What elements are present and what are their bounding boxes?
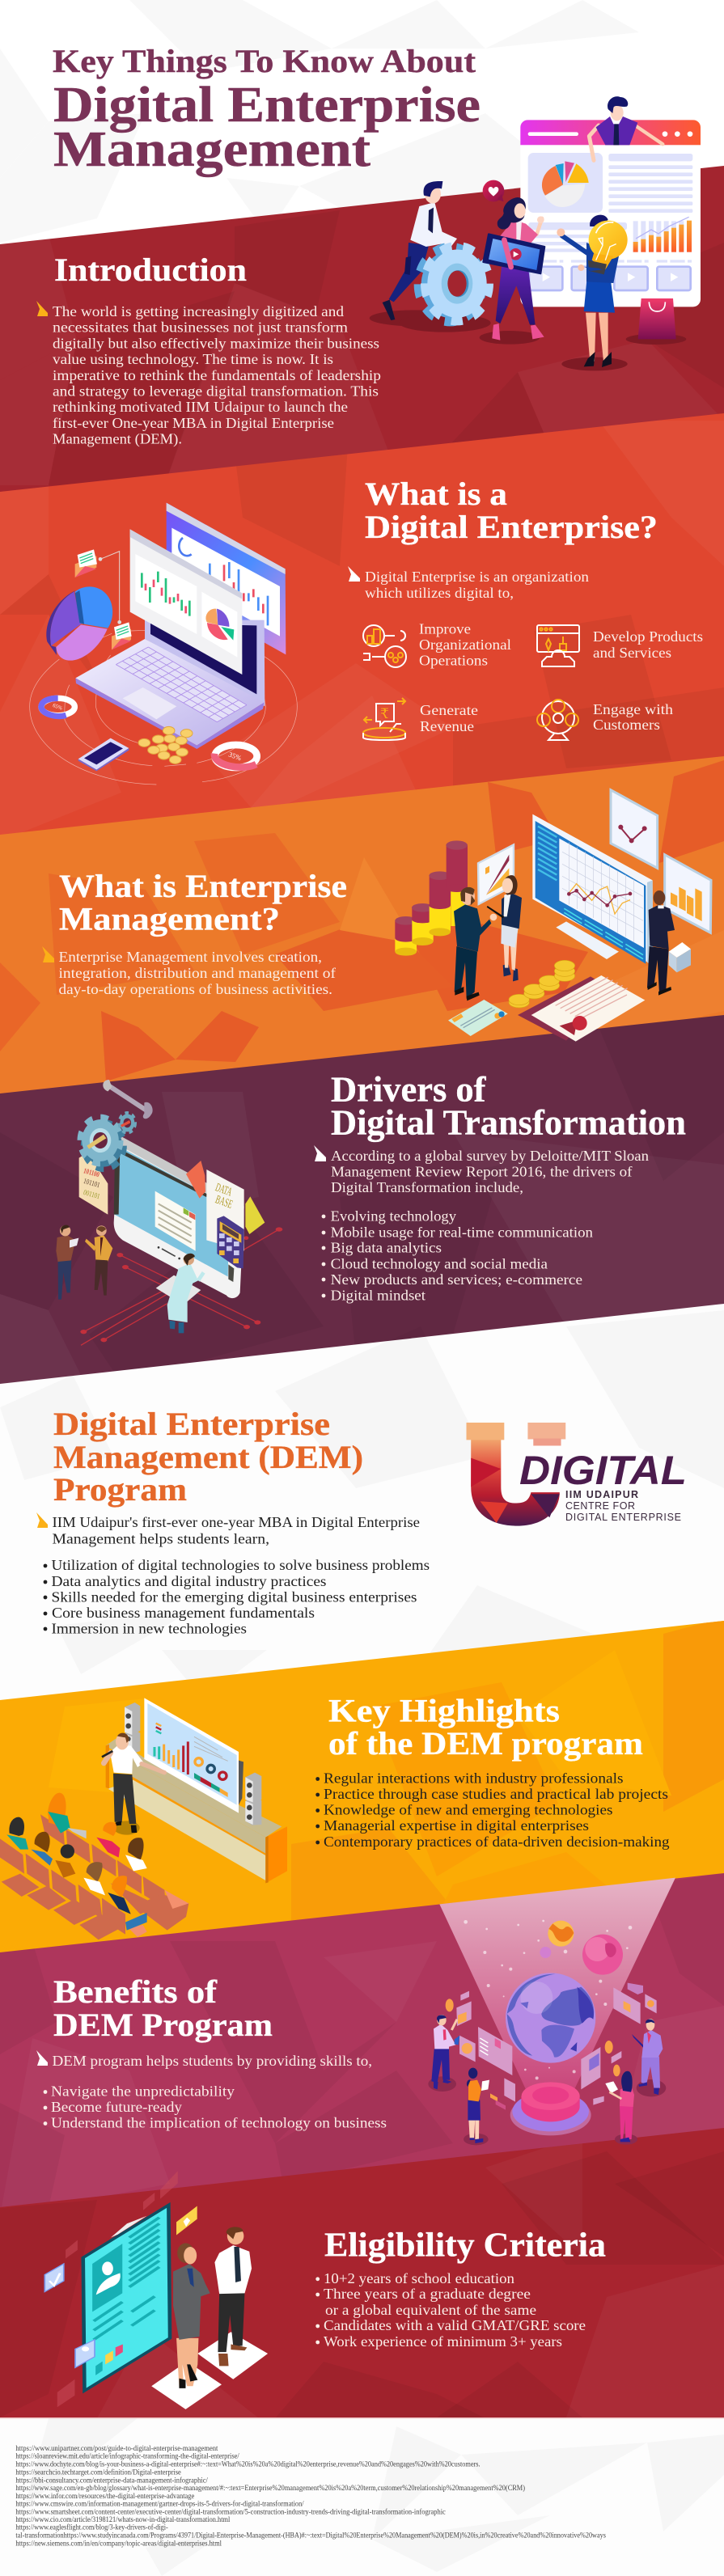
label: generate revenue [420,702,478,734]
list: drivers of digital transformation: Evolving technology [331,1208,456,1225]
panel: DEM program background [0,1304,724,1700]
text block: introduction [36,301,381,448]
list: benefits: Become future-ready [51,2099,182,2115]
text block: references: https://www.unipartner.com/post/guide-to-digital-enterprise-management [15,2445,218,2453]
label: improve organizational operations: Improve [419,621,471,637]
heading: DEM program: Program [53,1471,187,1508]
text block: introduction: rethinking motivated IIM Udaipur to launch the [53,399,348,415]
text block: references: https://www.eaglesflight.com/blog/3-key-drivers-of-digi- [15,2523,168,2532]
list: DEM program learnings: Core business management fundamentals [52,1605,315,1621]
text block: drivers intro: According to a global survey by Deloitte/MIT Sloan [331,1148,649,1164]
heading: DEM program: Management (DEM) [53,1439,363,1475]
text block: digital enterprise definition: which utilizes digital to, [365,585,514,601]
list: eligibility criteria [315,2270,586,2350]
logo: U Digital IIM Udaipur Centre for Digital Enterprise: CENTRE FOR [565,1500,635,1512]
list: benefits: Understand the implication of technology on business [51,2115,387,2131]
icon: generate revenue: ₹ [380,706,389,721]
label: improve organizational operations: Organizational [419,637,511,653]
label: engage with customers [593,701,673,733]
text block: references: https://www.dochyte.com/blog/is-your-business-a-digital-enterprise#:~:text=What%20is%20a%20digital%20enterprise,revenue%20and%20engages%20with%20customers. [15,2461,481,2469]
text block: DEM program intro: Management helps students learn, [52,1530,269,1546]
title [53,43,481,177]
text block: references: https://www.cmswire.com/information-management/gartner-drops-its-5-drivers-for-digital-transformation/ [15,2499,304,2508]
list: drivers of digital transformation: Cloud technology and social media [331,1255,548,1271]
list: eligibility criteria: Three years of a graduate degree [324,2286,531,2302]
text block: introduction: digitally but also effectively maximize their business [53,335,379,351]
text block: digital enterprise definition [348,566,589,601]
illustration: monitor with gears and database: 001101 [83,1189,101,1201]
list: eligibility criteria: Work experience of minimum 3+ years [324,2333,562,2350]
panel: drivers of digital transformation background [0,1015,724,1384]
text block: drivers intro [314,1145,649,1195]
heading: drivers of digital transformation: Digital Transformation [331,1103,686,1143]
panel: key highlights background [0,1621,724,1952]
text block: references: https://www.sage.com/en-gb/blog/glossary/what-is-enterprise-management/#:~:text=Enterprise%20management%20is%20a%20term,customer%20relationship%20management%20(CRM) [15,2484,525,2493]
list: eligibility criteria: 10+2 years of school education [324,2270,514,2286]
logo: U Digital IIM Udaipur Centre for Digital Enterprise [467,1423,687,1526]
list: benefits [44,2083,387,2131]
panel: introduction background [0,166,724,492]
heading: key highlights: of the DEM program [328,1725,643,1762]
label: develop products and services [593,628,703,661]
illustration: monitor with gears and database: BASE [214,1193,235,1212]
illustration: team building a digital dashboard [370,96,701,370]
heading: DEM program [53,1406,363,1508]
list: key highlights: Knowledge of new and emerging technologies [324,1802,613,1818]
text block: DEM program intro [36,1512,420,1546]
logo: U Digital IIM Udaipur Centre for Digital Enterprise: DIGITAL [519,1448,687,1493]
label: develop products and services: and Services [593,645,671,661]
icon: develop products and services [537,625,579,666]
text block: drivers intro: Management Review Report 2016, the drivers of [331,1164,633,1180]
panel: references background [0,2417,724,2576]
text block: enterprise management: Enterprise Management involves creation, [58,949,322,965]
illustration: resume clipboard and candidates [44,2171,268,2409]
heading: introduction: Introduction [54,252,247,288]
heading: what is enterprise management: What is Enterprise [59,868,347,904]
panel: eligibility criteria background [0,2128,724,2418]
heading: DEM program: Digital Enterprise [53,1406,330,1442]
text block: references: https://bbi-consultancy.com/enterprise-data-management-infographic/ [15,2476,208,2485]
heading: drivers of digital transformation [331,1070,686,1143]
heading: what is a digital enterprise: What is a [365,476,507,512]
text block: references: https://new.siemens.com/in/en/company/topic-areas/digital-enterprises.html [15,2540,222,2549]
text block: digital enterprise definition: Digital Enterprise is an organization [365,569,589,585]
icon: generate revenue [363,698,405,740]
text block: drivers intro: Digital Transformation include, [331,1179,523,1195]
illustration: monitor with gears and database [56,1080,282,1345]
list: DEM program learnings: Data analytics and digital industry practices [52,1573,327,1589]
list: drivers of digital transformation [322,1208,593,1303]
text block: references: tal-transformationhttps://www.studyincanada.com/Programs/43971/Digital-Enterprise-Management-(HBA)#:~:text=Digital%20Enterprise%20Management%20(DEM)%20is,in%20creative%20and%20innovative%20ways [15,2532,606,2540]
heading: benefits of DEM program: DEM Program [53,2007,273,2043]
text block: introduction: and strategy to leverage digital transformation. This [53,383,379,400]
panel: what is enterprise management background [0,756,724,1093]
illustration: monitor with gears and database: DATA [214,1181,234,1199]
logo: U Digital IIM Udaipur Centre for Digital Enterprise: DIGITAL ENTERPRISE [565,1512,681,1523]
list: benefits: Navigate the unpredictability [51,2083,235,2100]
text block: references: https://www.smartsheet.com/content-center/executive-center/digital-transformation/5-construction-industry-trends-driving-digital-transformation-infographic [15,2507,446,2516]
label: engage with customers: Engage with [593,701,673,717]
list: eligibility criteria: Candidates with a valid GMAT/GRE score [324,2317,586,2333]
heading: drivers of digital transformation: Drivers of [331,1070,487,1110]
list: drivers of digital transformation: Big data analytics [331,1240,442,1256]
list: DEM program learnings [44,1557,430,1637]
text block: enterprise management: integration, distribution and management of [58,965,336,981]
text block: introduction: first-ever One-year MBA in Digital Enterprise [53,415,334,431]
text block: DEM program intro: IIM Udaipur's first-ever one-year MBA in Digital Enterprise [52,1514,420,1530]
heading: key highlights [328,1692,643,1762]
text block: introduction: necessitates that businesses not just transform [53,319,348,336]
list: eligibility criteria: or a global equivalent of the same [325,2302,536,2318]
heading: eligibility criteria: Eligibility Criteria [324,2227,606,2265]
list: drivers of digital transformation: Digital mindset [331,1287,426,1303]
text block: enterprise management: day-to-day operations of business activities. [58,981,332,997]
heading: key highlights: Key Highlights [328,1692,560,1729]
label: generate revenue: Revenue [420,718,474,734]
illustration: isometric laptop with charts: 65% [52,703,63,712]
illustration: globe hologram with team [428,1878,675,2145]
illustration: isometric laptop with charts: 35% [227,751,243,762]
heading: what is enterprise management [59,868,347,937]
list: key highlights: Practice through case studies and practical lab projects [324,1786,668,1802]
text block: introduction: imperative to rethink the fundamentals of leadership [53,367,381,383]
heading: what is a digital enterprise: Digital Enterprise? [365,509,658,545]
title: Management [53,122,370,177]
text block: enterprise management [42,946,336,997]
list: key highlights [315,1770,670,1850]
label: generate revenue: Generate [420,702,478,718]
illustration: monitor with gears and database: 101101 [83,1178,101,1190]
list: drivers of digital transformation: New products and services; e-commerce [331,1271,582,1288]
panel: benefits of DEM background [0,1873,724,2207]
label: improve organizational operations: Operations [419,653,488,669]
list: key highlights: Managerial expertise in digital enterprises [324,1817,589,1834]
text block: references [15,2445,606,2549]
list: drivers of digital transformation: Mobile usage for real-time communication [331,1224,593,1240]
illustration: isometric business team with analytics screens [395,790,711,1042]
text block: references: https://www.infor.com/resources/the-digital-enterprise-advantage [15,2492,194,2501]
list: DEM program learnings: Utilization of digital technologies to solve business problems [52,1557,430,1573]
list: key highlights: Regular interactions with industry professionals [324,1770,623,1786]
text block: references: https://www.cio.com/article/3198121/whats-now-in-digital-transformation.html [15,2515,231,2524]
logo: U Digital IIM Udaipur Centre for Digital Enterprise: IIM UDAIPUR [565,1489,638,1500]
panel: what is a digital enterprise background [0,413,724,835]
icon: improve organizational operations [363,625,406,667]
text block: references: https://sloanreview.mit.edu/article/infographic-transforming-the-digital-enterprise/ [15,2452,239,2461]
heading: what is enterprise management: Management? [59,901,280,937]
heading: what is a digital enterprise [365,476,658,545]
text block: references: https://searchcio.techtarget.com/definition/Digital-enterprise [15,2468,181,2477]
heading: benefits of DEM program: Benefits of [53,1973,218,2010]
list: key highlights: Contemporary practices of data-driven decision-making [324,1834,670,1850]
text block: introduction: Management (DEM). [53,431,182,448]
illustration: isometric laptop with charts [30,503,297,785]
list: DEM program learnings: Skills needed for the emerging digital business enterprises [52,1588,417,1605]
label: engage with customers: Customers [593,717,660,733]
heading: benefits of DEM program [53,1973,273,2043]
icon: engage with customers [537,700,578,740]
illustration: monitor with gears and database: 101100 [83,1167,100,1179]
title: Digital Enterprise [53,78,481,133]
label: improve organizational operations [419,621,511,669]
text block: introduction: value using technology. The time is now. It is [53,351,333,367]
text block: introduction: The world is getting increasingly digitized and [53,303,344,319]
list: DEM program learnings: Immersion in new technologies [52,1621,247,1637]
label: develop products and services: Develop Products [593,628,703,645]
text block: benefits intro: DEM program helps students by providing skills to, [52,2053,372,2069]
illustration: seminar presenter and audience [0,1698,287,1939]
title: Key Things To Know About [53,43,476,79]
